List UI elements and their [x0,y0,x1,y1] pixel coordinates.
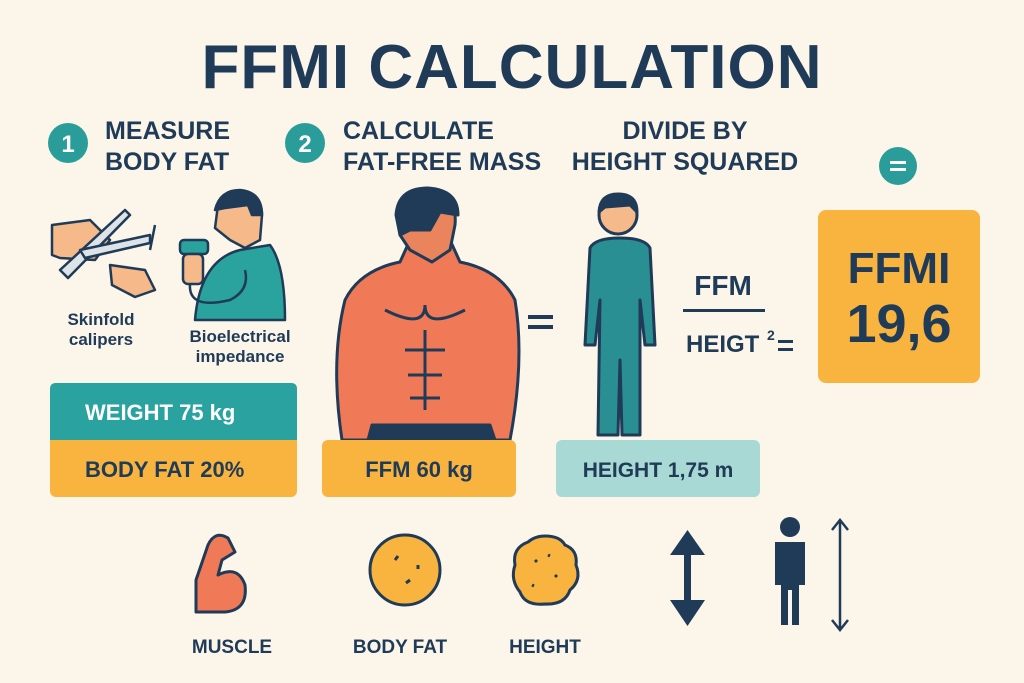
step 3 heading: HEIGHT SQUARED [572,148,798,176]
step 2 heading: FAT-FREE MASS [343,148,541,176]
box: weight and body fat: BODY FAT 20% [85,457,244,482]
title: FFMI CALCULATION [202,33,822,102]
step 2 heading [285,117,541,176]
label: skinfold calipers [67,310,135,349]
icon: thin height arrow [832,520,848,630]
icon: body fat circle [370,535,440,605]
icon: skinfold calipers [52,210,155,297]
label: skinfold calipers: Skinfold [67,310,135,329]
step 1 heading: BODY FAT [105,148,229,176]
step 2 heading: 2 [298,131,312,158]
icon: fat blob [513,536,578,604]
box: weight and body fat [50,383,297,497]
equals sign [528,315,553,329]
step 1 heading [48,117,230,176]
label: bioelectrical impedance [189,327,291,366]
label: skinfold calipers: calipers [69,330,133,349]
step 2 heading: CALCULATE [343,117,494,145]
formula: FFM / height squared: HEIGT [686,331,760,358]
step 3 heading: DIVIDE BY [622,117,748,145]
step 1 heading: MEASURE [105,117,230,145]
box: weight and body fat: WEIGHT 75 kg [85,400,235,425]
icon: muscle arm [196,535,245,612]
icon: person silhouette [775,517,805,625]
icon: equals circle [879,147,917,185]
box: FFM 60 kg [322,440,516,497]
label: bioelectrical impedance: Bioelectrical [189,327,291,346]
icon: standing person [585,194,655,435]
formula: FFM / height squared: 2 [767,327,775,343]
formula: FFM / height squared: FFM [694,270,752,301]
step 3 heading [572,117,798,176]
label: body fat: BODY FAT [353,637,448,658]
result box: FFMI 19,6: 19,6 [846,294,952,354]
formula: FFM / height squared [683,270,793,358]
result box: FFMI 19,6 [818,210,980,383]
step 1 heading: 1 [61,131,75,158]
result box: FFMI 19,6: FFMI [848,244,950,293]
label: bioelectrical impedance: impedance [196,347,284,366]
icon: double arrow [670,530,705,626]
icon: muscular man [337,188,519,440]
box: FFM 60 kg: FFM 60 kg [365,457,473,482]
box: height 1,75 m [556,440,760,497]
box: height 1,75 m: HEIGHT 1,75 m [583,459,733,482]
label: height: HEIGHT [509,637,581,658]
label: muscle: MUSCLE [192,637,272,658]
icon: bioelectrical impedance person [180,190,285,320]
